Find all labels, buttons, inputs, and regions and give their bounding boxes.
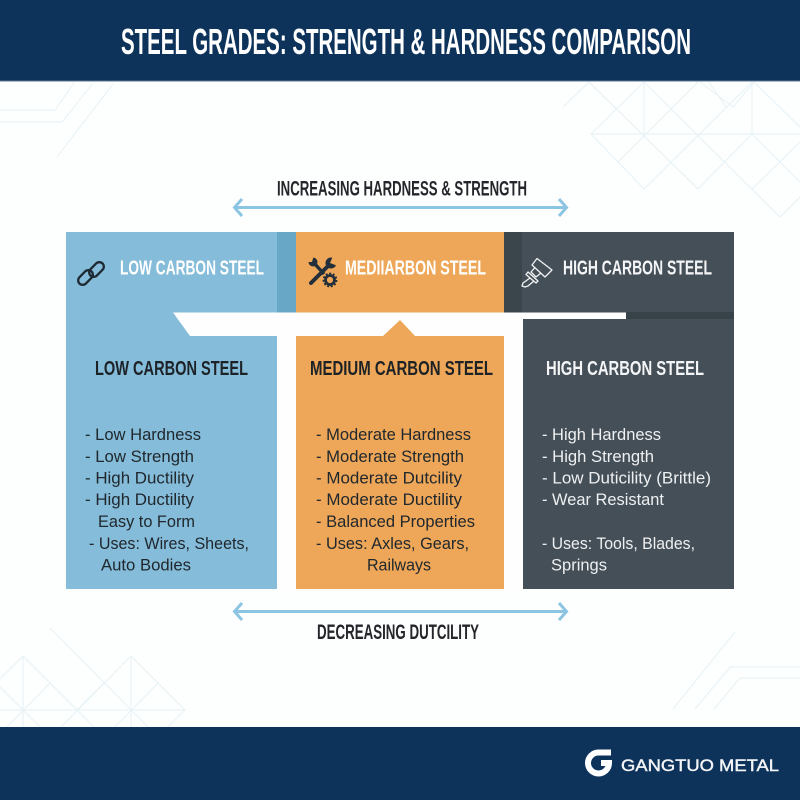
card text: low carbon steel	[85, 358, 249, 574]
property list: medium carbon steel: - Moderate Hardness	[316, 426, 471, 444]
header label: low carbon steel: LOW CARBON STEEL	[120, 258, 264, 280]
footer band	[0, 727, 800, 800]
icon: hammer	[522, 258, 552, 287]
property list: high carbon steel: - Uses: Tools, Blades,	[542, 535, 695, 553]
card heading: medium carbon steel: MEDIUM CARBON STEEL	[310, 358, 493, 380]
arrow: increasing hardness	[234, 199, 566, 216]
arrow: decreasing ductility	[234, 603, 566, 620]
property list: low carbon steel	[85, 426, 249, 574]
card text: high carbon steel	[542, 358, 711, 574]
property list: medium carbon steel	[316, 426, 475, 574]
property list: low carbon steel: Easy to Form	[98, 513, 195, 531]
header band	[0, 0, 800, 82]
panel: medium carbon steel	[296, 232, 504, 589]
property list: low carbon steel: - Low Strength	[85, 448, 194, 466]
icon: chain link	[76, 260, 106, 287]
property list: low carbon steel: - Low Hardness	[85, 426, 201, 444]
property list: medium carbon steel: - Moderate Strength	[316, 448, 464, 466]
property list: high carbon steel	[542, 426, 711, 574]
property list: low carbon steel: - High Ductility	[85, 491, 195, 509]
card heading: high carbon steel: HIGH CARBON STEEL	[546, 358, 704, 380]
header label: high carbon steel: HIGH CARBON STEEL	[563, 258, 712, 280]
property list: low carbon steel: - Uses: Wires, Sheets,	[89, 535, 249, 553]
bottom label: decreasing ductility: DECREASING DUTCILITY	[317, 621, 479, 644]
company name: GANGTUO METAL	[621, 757, 779, 775]
card heading: low carbon steel: LOW CARBON STEEL	[95, 358, 248, 380]
icon: wrench and gear	[305, 255, 340, 286]
panel: low carbon steel	[66, 232, 296, 589]
card text: medium carbon steel	[310, 358, 493, 574]
property list: high carbon steel: - Low Duticility (Brittle)	[542, 470, 711, 488]
property list: medium carbon steel: - Moderate Ductility	[316, 491, 463, 509]
property list: medium carbon steel: - Uses: Axles, Gears,	[316, 535, 469, 553]
header label: medium carbon steel: MEDIIARBON STEEL	[345, 258, 486, 280]
property list: medium carbon steel: Railways	[367, 556, 431, 574]
property list: high carbon steel: Springs	[551, 556, 607, 574]
property list: low carbon steel: - High Ductility	[85, 470, 195, 488]
property list: medium carbon steel: - Balanced Properties	[316, 513, 475, 531]
property list: high carbon steel: - High Hardness	[542, 426, 661, 444]
panel: high carbon steel	[504, 232, 734, 589]
connector: white bracket with pointer	[173, 312, 626, 589]
property list: low carbon steel: Auto Bodies	[101, 556, 191, 574]
property list: medium carbon steel: - Moderate Dutcility	[316, 470, 463, 488]
icon: company logo	[588, 752, 611, 774]
property list: high carbon steel: - Wear Resistant	[542, 491, 664, 509]
top label: increasing hardness and strength: INCREASING HARDNESS & STRENGTH	[277, 176, 527, 200]
property list: high carbon steel: - High Strength	[542, 448, 654, 466]
